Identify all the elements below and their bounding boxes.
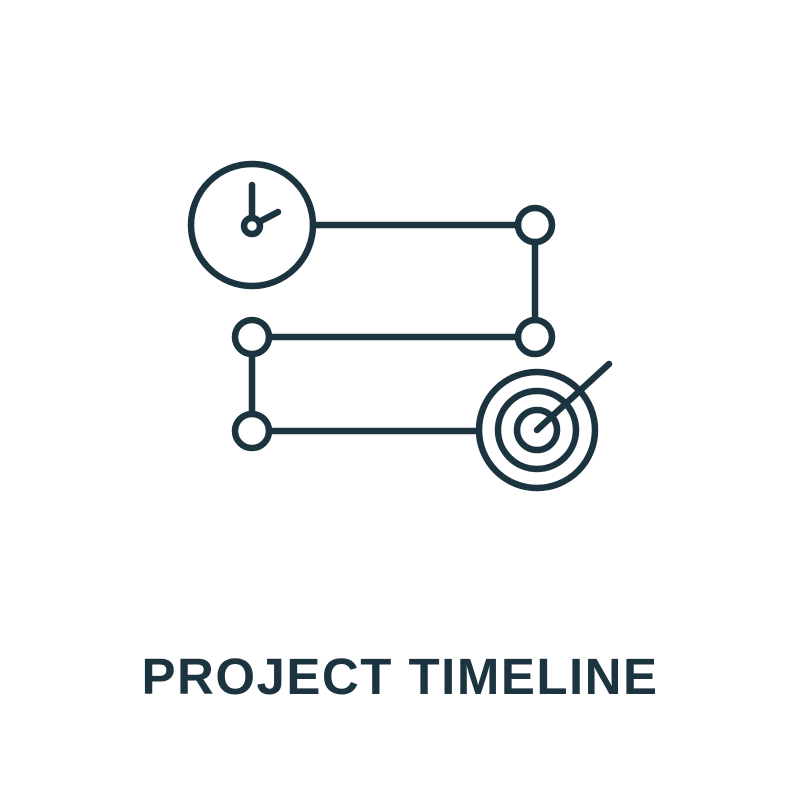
icon: clock	[191, 164, 313, 286]
timeline path	[235, 208, 552, 448]
icon: target	[479, 364, 609, 488]
title: PROJECT TIMELINE	[141, 648, 659, 705]
